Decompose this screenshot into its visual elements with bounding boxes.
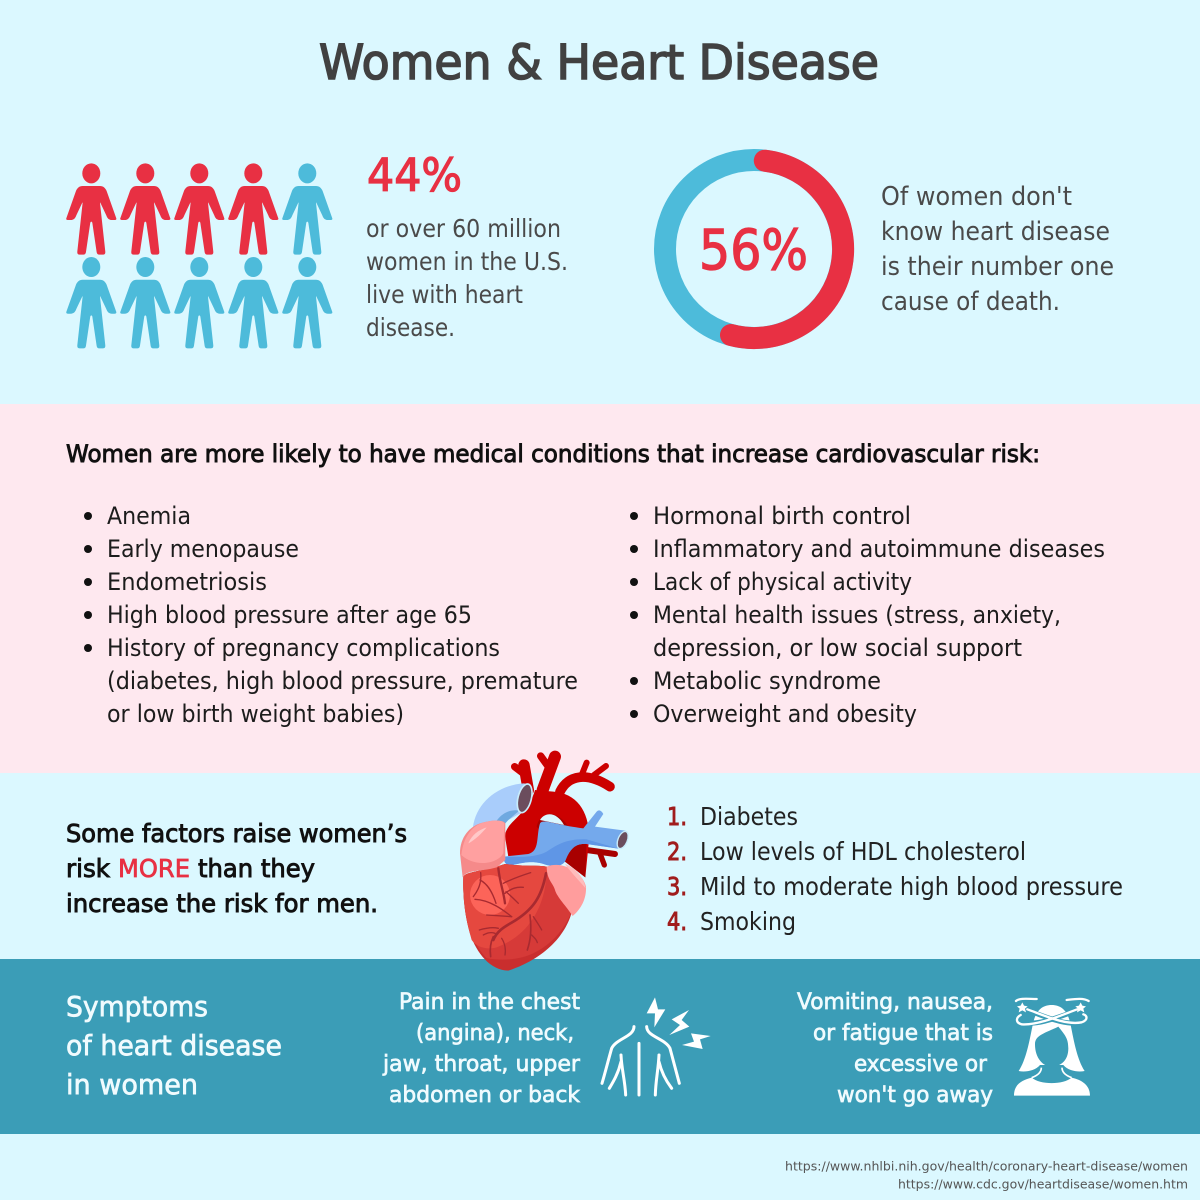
text block: nausea symptom: Vomiting, nausea, — [797, 989, 993, 1015]
list: conditions right column — [630, 502, 1105, 728]
list: conditions right column: Lack of physical activity — [653, 568, 912, 596]
left ventricle — [463, 864, 573, 971]
statistic: 44%: 44% — [367, 149, 462, 202]
text block: nausea symptom — [797, 989, 993, 1108]
list: conditions right column: Metabolic syndrome — [653, 667, 881, 695]
vena cava — [473, 782, 535, 837]
text block: 56% description: cause of death. — [881, 287, 1060, 317]
list: factors: Low levels of HDL cholesterol — [700, 837, 1026, 866]
text block: nausea symptom: or fatigue that is — [813, 1020, 993, 1046]
text block: sources: https://www.cdc.gov/heartdisease/women.htm — [898, 1176, 1188, 1192]
atria — [460, 821, 586, 916]
chart: 56% donut — [665, 160, 843, 338]
title: Women & Heart Disease — [319, 35, 879, 91]
list: factors: Mild to moderate high blood pressure — [700, 872, 1123, 901]
text block: pain symptom: abdomen or back — [389, 1082, 580, 1108]
list: conditions right column: Hormonal birth control — [653, 502, 911, 530]
text block: 56% description — [881, 182, 1114, 317]
heading: symptoms: Symptoms — [66, 990, 208, 1023]
text block: 56% description: is their number one — [881, 252, 1114, 282]
text block: sources: https://www.nhlbi.nih.gov/health/coronary-heart-disease/women — [785, 1158, 1188, 1174]
text block: 44% description — [366, 214, 568, 342]
panel: medical conditions — [0, 404, 1200, 773]
list: conditions left column: Endometriosis — [107, 568, 267, 596]
panel: symptoms band — [0, 959, 1200, 1134]
text block: nausea symptom: won't go away — [837, 1082, 993, 1108]
icon: body with pain bolts — [602, 997, 711, 1095]
heading: symptoms: in women — [66, 1068, 198, 1101]
icon: anatomical heart — [460, 756, 630, 971]
list: conditions left column: (diabetes, high blood pressure, premature — [107, 667, 578, 695]
text block: 56% description: Of women don't — [881, 182, 1072, 212]
text block: factors raising risk: MORE — [118, 854, 190, 883]
list: conditions left column: Anemia — [107, 502, 191, 530]
icon: dizzy woman — [1014, 999, 1090, 1096]
text block: 44% description: disease. — [366, 313, 455, 342]
text block: pain symptom: (angina), neck, — [416, 1020, 574, 1046]
statistic: 56%: 56% — [699, 218, 808, 282]
text block: factors raising risk: increase the risk for men. — [66, 889, 378, 918]
text block: pain symptom — [382, 989, 581, 1108]
list: conditions right column: Overweight and obesity — [653, 700, 917, 728]
list: conditions left column: Early menopause — [107, 535, 299, 563]
text block: factors raising risk — [66, 819, 407, 918]
list: conditions left column: High blood pressure after age 65 — [107, 601, 472, 629]
text block: 44% description: or over 60 million — [366, 214, 561, 243]
text block: nausea symptom: excessive or — [854, 1051, 988, 1077]
aorta arch — [505, 790, 589, 877]
text block: factors raising risk: than they — [198, 854, 315, 883]
list: factors: Diabetes — [700, 802, 798, 831]
list: factors: 1. — [667, 802, 687, 831]
list: conditions left column: or low birth weight babies) — [107, 700, 404, 728]
list: factors: 2. — [667, 837, 687, 866]
text block: factors raising risk: risk — [66, 854, 111, 883]
list: conditions right column: depression, or low social support — [653, 634, 1022, 662]
heading: symptoms: of heart disease — [66, 1029, 282, 1062]
pulmonary artery — [503, 810, 630, 866]
list: conditions right column: Mental health issues (stress, anxiety, — [653, 601, 1061, 629]
text block: 56% description: know heart disease — [881, 217, 1110, 247]
text block: 44% description: women in the U.S. — [366, 247, 568, 276]
text block: pain symptom: Pain in the chest — [399, 989, 580, 1015]
heading: medical conditions: Women are more likely to have medical conditions that increase cardiovascular risk: — [66, 440, 1040, 468]
list: conditions right column: Inflammatory and autoimmune diseases — [653, 535, 1105, 563]
list: conditions left column: History of pregnancy complications — [107, 634, 500, 662]
aorta branches — [515, 756, 615, 865]
list: factors: Smoking — [700, 907, 796, 936]
list: factors: 3. — [667, 872, 687, 901]
heading: symptoms — [66, 990, 282, 1101]
list: conditions left column — [84, 502, 578, 728]
list: factors — [667, 802, 1123, 936]
text block: factors raising risk: Some factors raise women’s — [66, 819, 407, 848]
list: factors: 4. — [667, 907, 687, 936]
text block: sources — [785, 1158, 1188, 1192]
chart: 44 percent pictogram of people — [66, 163, 332, 348]
text block: 44% description: live with heart — [366, 280, 523, 309]
text block: pain symptom: jaw, throat, upper — [382, 1051, 581, 1077]
